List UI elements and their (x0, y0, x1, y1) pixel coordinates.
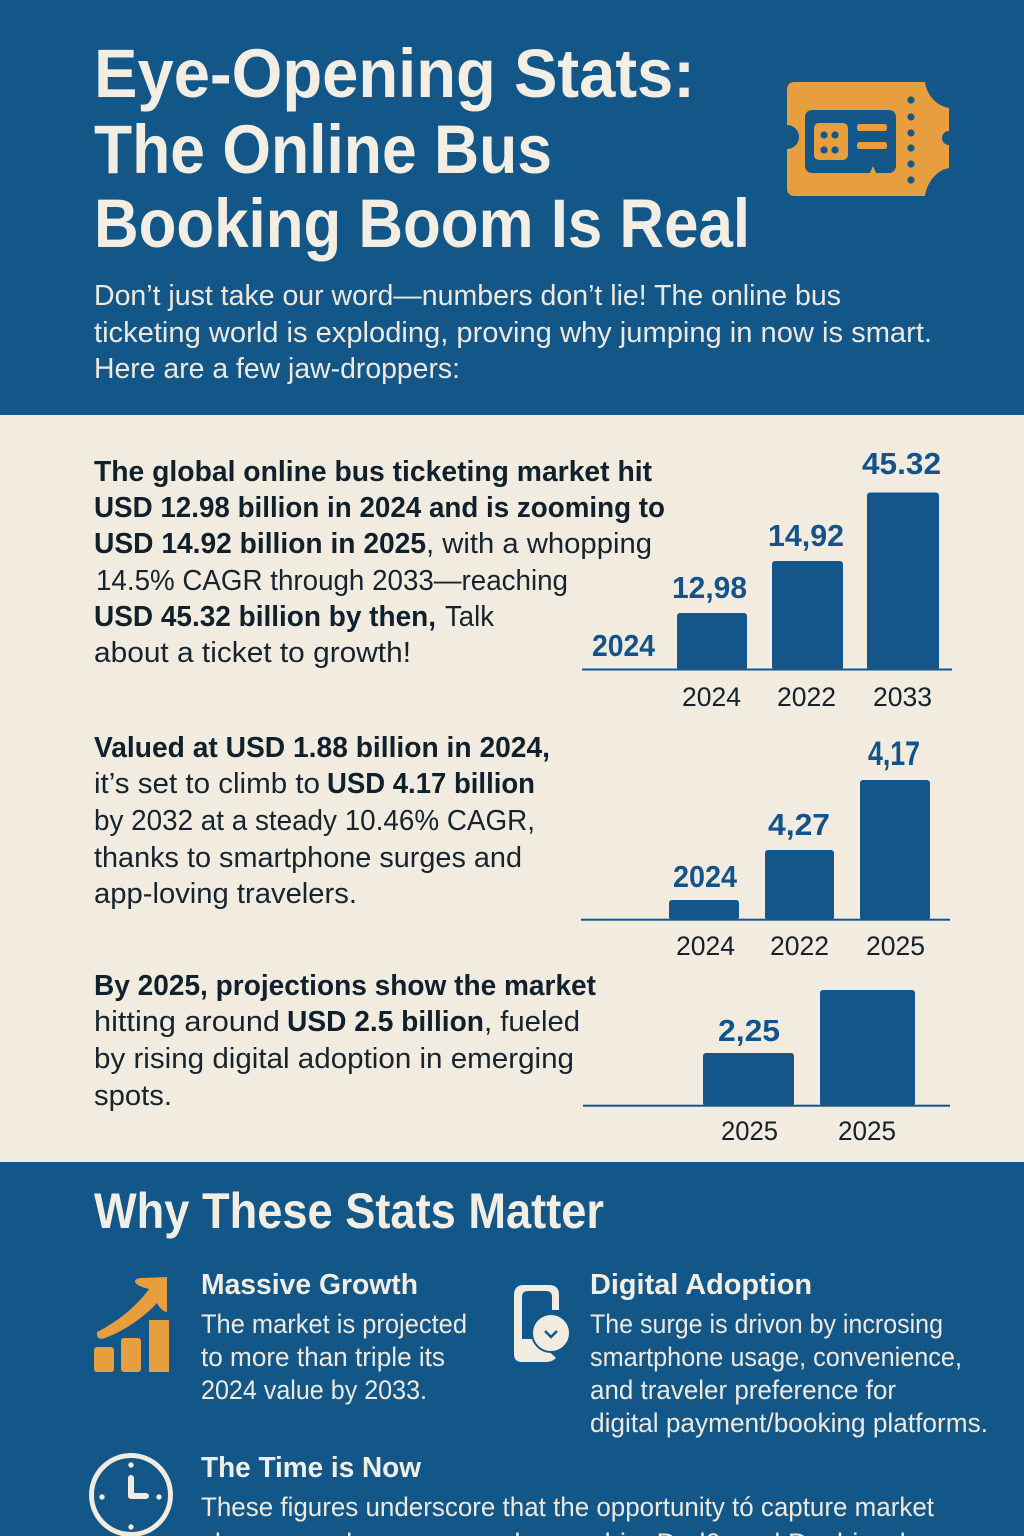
text block: global market stat: USD 12.98 billion in 2024 and is zooming to (94, 492, 665, 524)
intro text: ticketing world is exploding, proving why jumping in now is smart. (94, 317, 932, 349)
icon: growth chart with arrow (94, 1277, 169, 1372)
text block: global market stat: 14.5% CAGR through 2033—reaching (96, 565, 568, 597)
bar chart: global market: 2024 (592, 628, 656, 663)
text block: valuation stat: app-loving travelers. (94, 878, 357, 910)
bar chart: valuation (581, 735, 950, 961)
text block: valuation stat: it’s set to climb to (94, 768, 320, 800)
text block: valuation stat: Valued at USD 1.88 billion in 2024, (94, 732, 550, 764)
bar chart: global market: 12,98 (672, 570, 747, 605)
text block: massive growth: to more than triple its (201, 1342, 445, 1372)
bar chart: global market: 45.32 (862, 446, 941, 481)
text block: massive growth (201, 1269, 467, 1405)
title (94, 35, 750, 262)
text block: global market stat: The global online bus ticketing market hit (94, 456, 652, 488)
text block: valuation stat (94, 732, 550, 910)
text block: digital adoption (590, 1269, 988, 1438)
bar chart: global market: 2022 (777, 682, 836, 712)
bar chart: global market: 2024 (682, 682, 741, 712)
text block: 2025 projection stat: By 2025, projections show the market (94, 970, 596, 1002)
text block: digital adoption: The surge is drivon by incrosing (590, 1309, 943, 1339)
bar chart: global market (582, 446, 952, 712)
intro text: Here are a few jaw-droppers: (94, 353, 460, 385)
text block: 2025 projection stat: USD 2.5 billion (287, 1006, 484, 1038)
text block: 2025 projection stat: by rising digital adoption in emerging (94, 1043, 574, 1075)
text block: 2025 projection stat: , fueled (484, 1006, 580, 1038)
text block: 2025 projection stat: spots. (94, 1080, 172, 1112)
text block: global market stat: Talk (445, 601, 494, 633)
icon: clock (92, 1456, 170, 1534)
bar chart: valuation: 4,27 (768, 807, 830, 842)
bar chart: valuation: 2024 (673, 859, 738, 894)
text block: global market stat: USD 14.92 billion in 2025 (94, 528, 426, 560)
text block: digital adoption: and traveler preference for (590, 1375, 896, 1405)
bar chart: 2025 projection (583, 990, 950, 1146)
text block: the time is now (201, 1452, 935, 1536)
title: Eye-Opening Stats: (94, 35, 695, 112)
bar chart: valuation: 2022 (770, 931, 829, 961)
bar chart: 2025 projection: 2025 (838, 1116, 896, 1146)
bar chart: valuation: 4,17 (868, 735, 920, 773)
panel: market stats (0, 415, 1024, 1162)
bar chart: global market: 14,92 (768, 518, 844, 553)
heading: Why These Stats Matter (94, 1183, 604, 1239)
text block: valuation stat: by 2032 at a steady 10.46% CAGR, (94, 805, 535, 837)
panel: why these stats matter (0, 1162, 1024, 1536)
text block: 2025 projection stat (94, 970, 596, 1112)
bar chart: valuation: 2024 (676, 931, 735, 961)
text block: valuation stat: USD 4.17 billion (327, 768, 535, 800)
text block: the time is now: These figures underscore that the opportunity tó capture market (201, 1492, 935, 1522)
text block: valuation stat: thanks to smartphone surges and (94, 842, 522, 874)
text block: digital adoption: Digital Adoption (590, 1269, 812, 1301)
intro text: Don’t just take our word—numbers don’t lie! The online bus (94, 280, 841, 312)
text block: global market stat: , with a whopping (426, 528, 652, 560)
bar chart: valuation: 2025 (866, 931, 925, 961)
bar chart: 2025 projection: 2,25 (718, 1013, 780, 1048)
text block: massive growth: Massive Growth (201, 1269, 418, 1301)
text block: the time is now: The Time is Now (201, 1452, 421, 1484)
text block: digital adoption: smartphone usage, convenience, (590, 1342, 962, 1372)
bar chart: global market: 2033 (873, 682, 932, 712)
text block: global market stat: USD 45.32 billion by then, (94, 601, 436, 633)
text block: 2025 projection stat: hitting around (94, 1006, 280, 1038)
header panel (0, 0, 1024, 415)
text block: digital adoption: digital payment/booking platforms. (590, 1408, 988, 1438)
text block: massive growth: The market is projected (201, 1309, 467, 1339)
text block: global market stat: about a ticket to growth! (94, 637, 411, 669)
text block: global market stat (94, 456, 665, 669)
icon: smartphone with check (514, 1285, 570, 1362)
bar chart: 2025 projection: 2025 (721, 1116, 778, 1146)
text block: massive growth: 2024 value by 2033. (201, 1375, 427, 1405)
intro text (94, 280, 932, 385)
title: Booking Boom Is Real (94, 185, 750, 262)
title: The Online Bus (94, 111, 552, 188)
icon: bus ticket (787, 82, 949, 196)
